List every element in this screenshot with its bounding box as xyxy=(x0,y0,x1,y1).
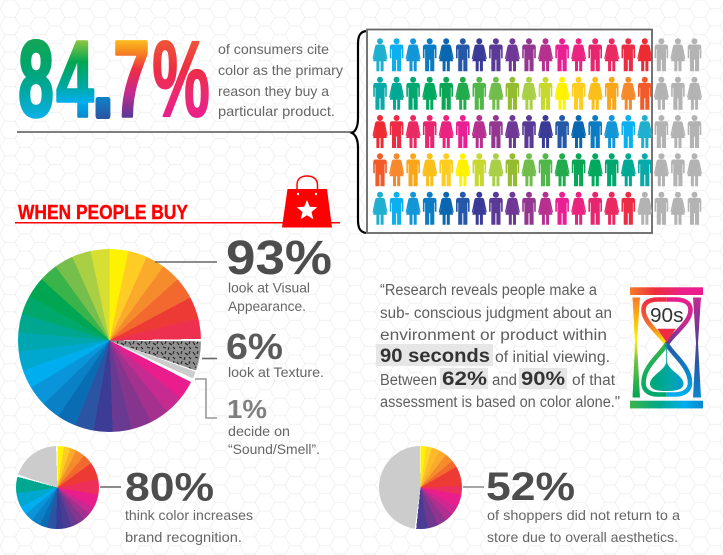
research quote: of initial viewing. xyxy=(495,349,610,366)
section heading: when people buy: WHEN PEOPLE BUY xyxy=(18,202,189,224)
headline statistic: 84.7%: 4 xyxy=(56,20,94,140)
93% connector xyxy=(155,261,217,263)
stat: 1% decide on sound/smell: 1% xyxy=(227,394,267,424)
heading underline xyxy=(15,222,340,224)
headline statistic: 84.7% xyxy=(18,18,210,140)
stat: 52% shoppers did not return: 52% xyxy=(486,465,575,509)
stat: 80% brand recognition: think color increases xyxy=(125,507,253,523)
stat: 1% decide on sound/smell xyxy=(227,394,320,457)
stat: 93% look at visual appearance xyxy=(226,232,332,314)
headline statistic: 84.7%: % xyxy=(152,18,210,139)
icon: hourglass 90s xyxy=(630,287,703,408)
small pie chart: 80% xyxy=(16,446,98,528)
headline statistic: 84.7%: . xyxy=(92,19,114,139)
research quote: “Research reveals people make a xyxy=(380,282,597,299)
stat: 52% shoppers did not return: store due to overall aesthetics. xyxy=(487,529,678,545)
stat: 80% brand recognition: 80% xyxy=(125,466,214,510)
52% connector xyxy=(463,486,484,488)
intro text: particular product. xyxy=(218,103,335,119)
research quote: and xyxy=(492,372,517,389)
stat: 6% look at texture: look at Texture. xyxy=(228,364,324,380)
intro text: of consumers cite xyxy=(218,41,329,57)
people row 3 xyxy=(372,115,701,148)
headline statistic: 84.7%: 8 xyxy=(18,19,54,139)
people row 5 xyxy=(372,192,701,225)
research quote: assessment is based on color alone." xyxy=(380,394,620,411)
stat: 80% brand recognition xyxy=(125,466,253,545)
research quote: 90% xyxy=(521,369,565,390)
research quote: sub- conscious judgment about an xyxy=(380,305,612,322)
stat: 80% brand recognition: brand recognition. xyxy=(125,529,242,545)
people row 4 xyxy=(373,153,702,186)
intro text xyxy=(218,41,343,119)
stat: 6% look at texture: 6% xyxy=(226,326,283,367)
research quote: 90 seconds xyxy=(380,346,490,367)
research quote: environment or product within xyxy=(380,327,607,344)
icon: hourglass 90s: 90s xyxy=(650,305,684,327)
divider under headline xyxy=(17,131,353,133)
stat: 1% decide on sound/smell: “Sound/Smell”. xyxy=(228,441,320,457)
main pie chart xyxy=(18,249,201,432)
80% connector xyxy=(100,486,121,488)
people row 1 xyxy=(372,38,701,71)
stat: 93% look at visual appearance: look at Visual xyxy=(228,280,310,296)
stat: 52% shoppers did not return xyxy=(486,465,680,545)
small pie chart: 52% xyxy=(378,446,462,528)
icon: shopping bag xyxy=(282,176,332,228)
stat: 93% look at visual appearance: Appearance. xyxy=(228,298,306,314)
research quote: Between xyxy=(380,372,437,389)
intro text: color as the primary xyxy=(218,62,343,78)
research quote: 62% xyxy=(442,369,487,390)
pie texture wedge xyxy=(109,341,201,370)
people row 2 xyxy=(373,77,702,110)
stat: 93% look at visual appearance: 93% xyxy=(226,232,332,285)
headline statistic: 84.7%: 7 xyxy=(113,18,150,139)
research quote: of that xyxy=(572,372,616,389)
intro text: reason they buy a xyxy=(218,83,329,99)
6% connector xyxy=(202,358,217,360)
stat: 52% shoppers did not return: of shoppers did not return to a xyxy=(487,507,680,523)
people frame xyxy=(367,30,652,233)
brace xyxy=(352,31,366,233)
stat: 1% decide on sound/smell: decide on xyxy=(228,423,290,439)
1% connector xyxy=(195,379,217,418)
research quote xyxy=(376,282,620,411)
stat: 6% look at texture xyxy=(226,326,324,380)
